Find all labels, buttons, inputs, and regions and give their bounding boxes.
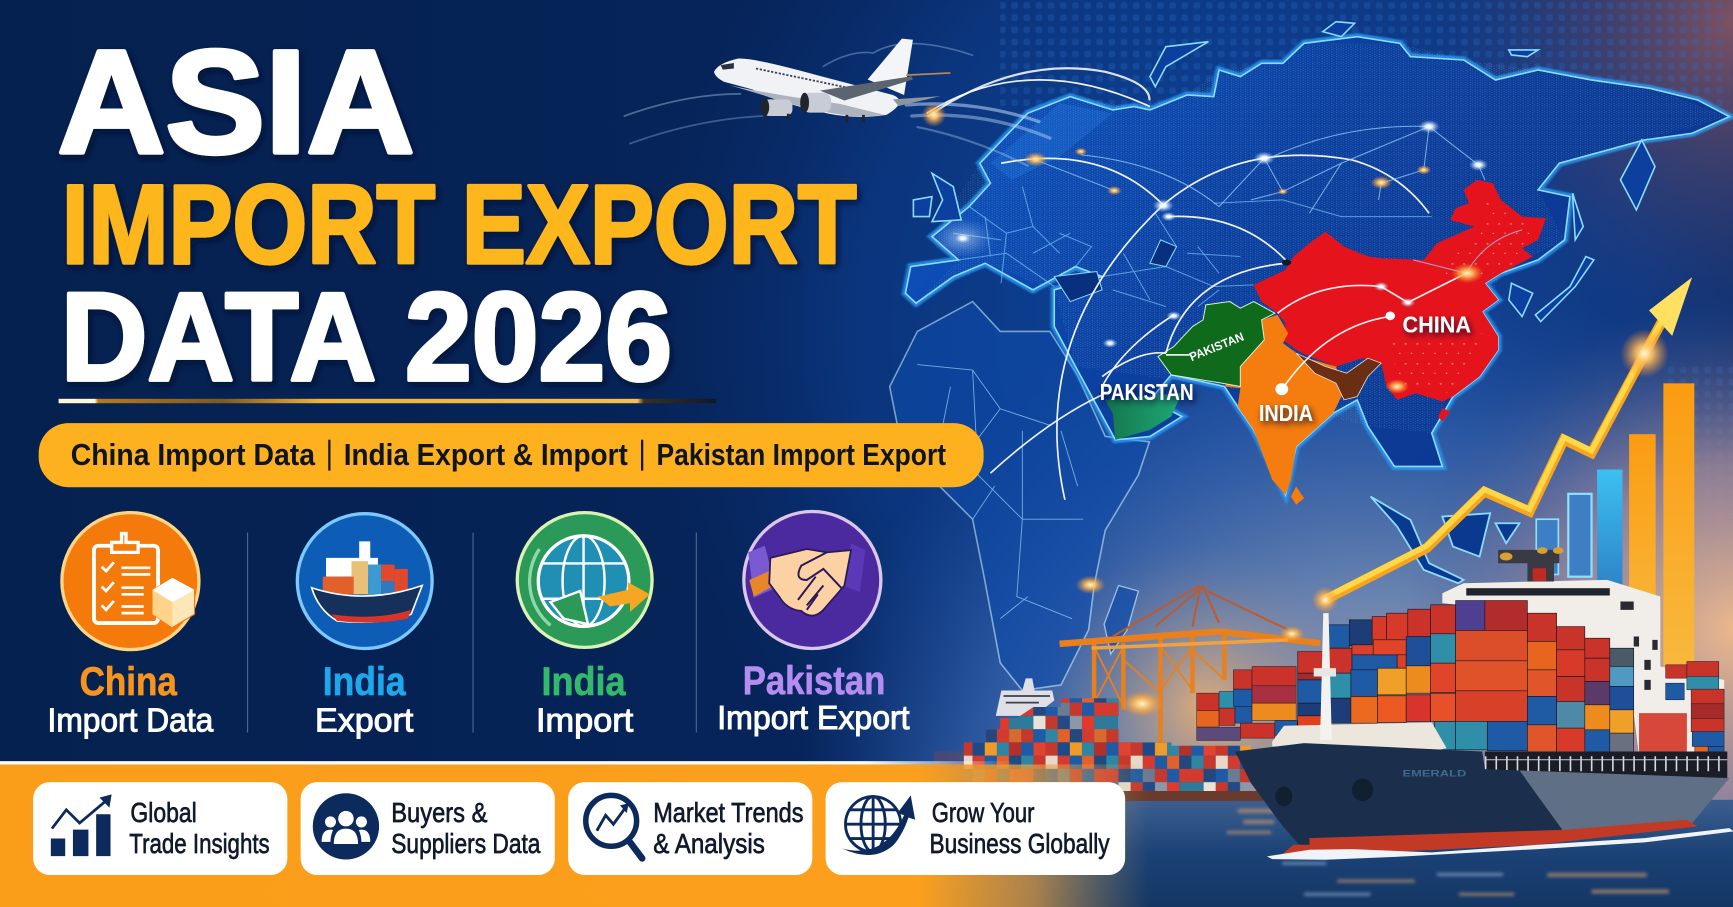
title xyxy=(57,20,857,407)
dockside container stacks xyxy=(917,678,1282,801)
Africa landmass xyxy=(890,302,1149,690)
text: Global xyxy=(130,797,197,828)
text: Suppliers Data xyxy=(391,828,541,859)
label: Pakistan: Pakistan xyxy=(743,659,885,703)
label: Pakistan: PAKISTAN xyxy=(1100,379,1194,405)
Eurasia landmass xyxy=(905,22,1729,495)
country: Pakistan label shape xyxy=(1105,393,1182,440)
country: Sri Lanka xyxy=(1291,486,1304,505)
network nodes xyxy=(954,120,1488,395)
inland borders xyxy=(953,187,1432,307)
label: Import Data: Import Data xyxy=(48,702,214,739)
small distant ship xyxy=(996,678,1054,716)
label: India: India xyxy=(323,660,406,704)
icon: bar chart with arrow xyxy=(51,794,112,856)
card: Market Trends and Analysis xyxy=(568,782,812,875)
item: Pakistan Import Export xyxy=(717,511,910,737)
label: China: China xyxy=(80,660,178,704)
card: Global Trade Insights xyxy=(33,782,287,875)
container ship xyxy=(1197,547,1733,860)
stern containers xyxy=(1666,661,1724,765)
item: India Import xyxy=(517,513,652,739)
subtitle pill xyxy=(39,423,984,487)
title rule xyxy=(59,399,716,403)
growth arrow xyxy=(1312,277,1692,613)
label: India: India xyxy=(542,660,626,704)
hull name: EMERALD xyxy=(1402,768,1466,779)
text: Business Globally xyxy=(929,828,1110,859)
ship hull xyxy=(1235,743,1729,856)
water xyxy=(906,800,1733,907)
icon: clipboard and box xyxy=(62,513,199,650)
world map xyxy=(890,22,1729,690)
text: Grow Your xyxy=(932,797,1034,828)
country: Nepal and Bhutan xyxy=(1296,353,1381,400)
label: Pakistan small: PAKISTAN xyxy=(1187,330,1246,364)
label: Export: Export xyxy=(315,702,413,739)
highlighted countries xyxy=(927,80,1546,505)
subtitle pill: India Export & Import xyxy=(344,437,628,472)
icon: globe with arrow xyxy=(842,795,915,855)
map labels xyxy=(1100,312,1471,426)
item: India Export xyxy=(297,514,432,739)
country: India xyxy=(1224,315,1368,495)
harbour crane xyxy=(1060,576,1320,743)
islands xyxy=(913,22,1655,322)
icon: people xyxy=(313,793,379,859)
contrails xyxy=(624,44,1149,166)
icon: globe with arrow xyxy=(517,513,652,647)
foredeck and mast xyxy=(1272,613,1447,751)
main container stack xyxy=(1298,601,1634,756)
wake xyxy=(1267,828,1733,860)
red waterline xyxy=(1278,820,1698,858)
text: Trade Insights xyxy=(129,828,270,859)
label: Import Export: Import Export xyxy=(717,700,910,737)
Southeast Asia islands xyxy=(1371,497,1519,583)
chart bars xyxy=(1536,383,1694,671)
column dividers xyxy=(248,532,696,732)
title line: DATA 2026: DATA 2026 xyxy=(61,268,672,407)
item: China Import Data xyxy=(48,513,214,739)
ship superstructure xyxy=(1442,547,1724,763)
icon: handshake xyxy=(744,511,881,648)
label: India: INDIA xyxy=(1259,400,1313,426)
text: & Analysis xyxy=(653,828,765,859)
icon: magnifier with trend xyxy=(586,795,642,858)
text: Buyers & xyxy=(391,797,487,828)
label: China: CHINA xyxy=(1403,312,1471,338)
country: China xyxy=(1254,180,1546,421)
icon: cargo ship xyxy=(297,514,432,648)
subtitle pill: China Import Data xyxy=(71,437,316,472)
growth chart xyxy=(1312,277,1694,671)
airplane xyxy=(624,39,1149,166)
label: Import: Import xyxy=(536,702,633,739)
subtitle pill: Pakistan Import Export xyxy=(657,437,946,472)
country: Pakistan xyxy=(1158,302,1275,387)
card: Buyers and Suppliers Data xyxy=(301,782,555,875)
text: Market Trends xyxy=(653,797,804,828)
card: Grow Your Business Globally xyxy=(826,782,1125,875)
left container stack xyxy=(1197,666,1297,740)
trade routes xyxy=(927,80,1466,500)
bottom band xyxy=(0,761,1149,907)
title line: IMPORT EXPORT: IMPORT EXPORT xyxy=(62,161,857,287)
title line: ASIA: ASIA xyxy=(57,20,414,184)
